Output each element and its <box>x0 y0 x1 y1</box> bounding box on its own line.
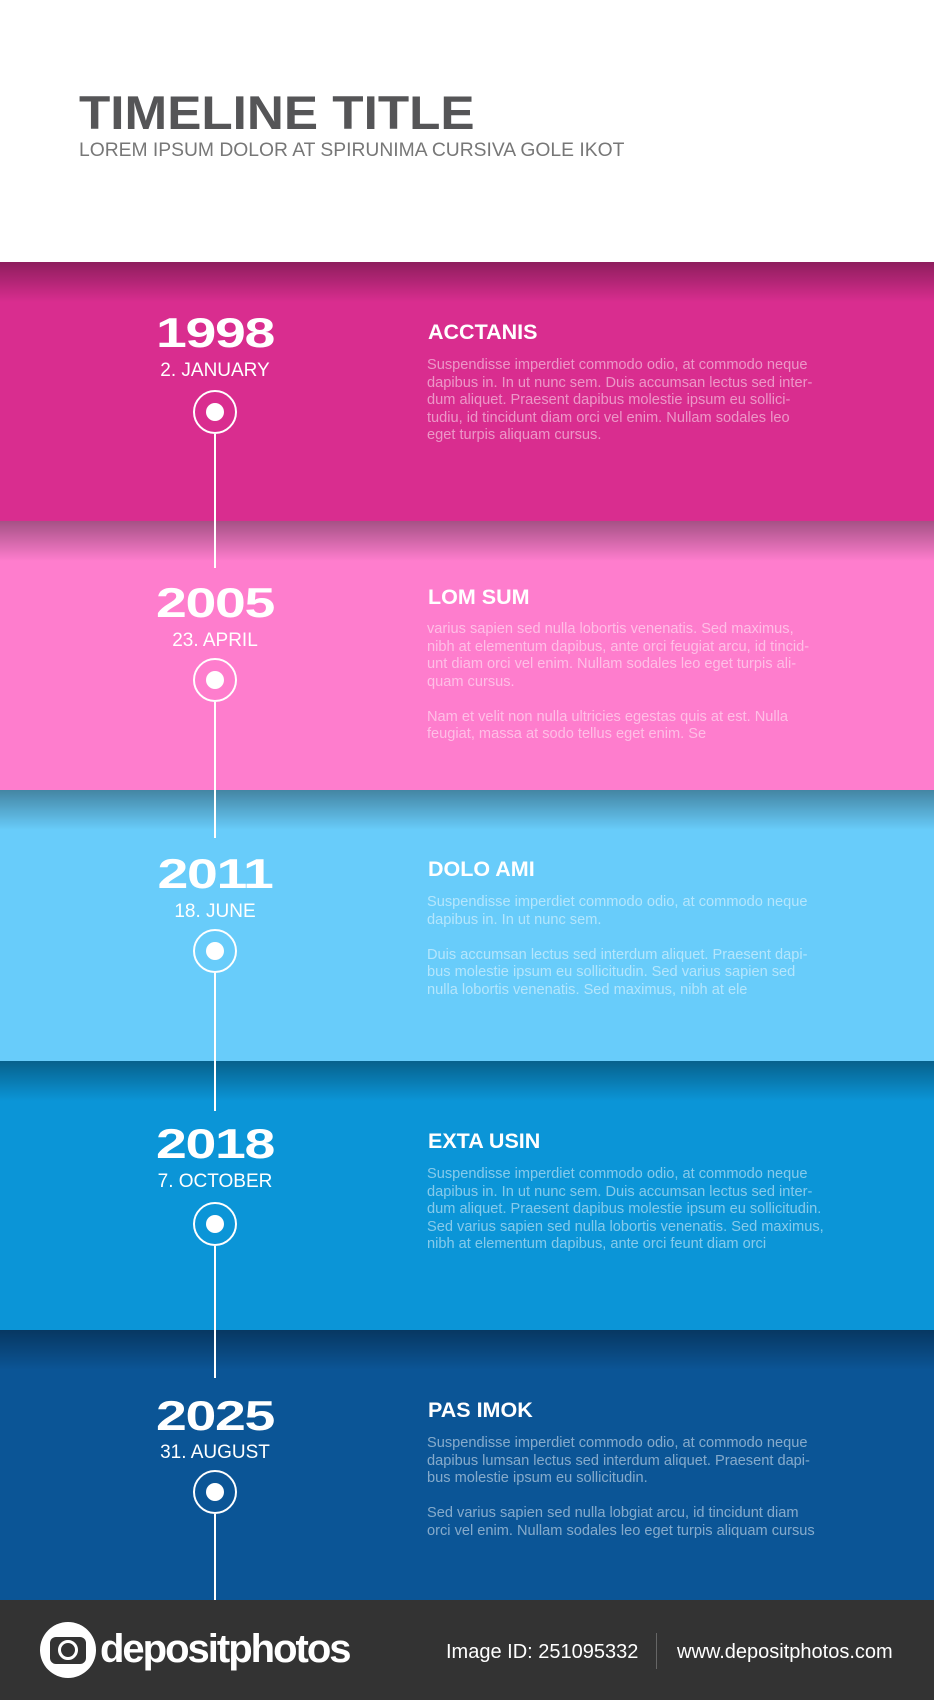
text 1998: tudiu, id tincidunt diam orci vel enim. Nullam sodales leo <box>427 410 790 426</box>
website: www.depositphotos.com <box>677 1641 893 1663</box>
text 2025: bus molestie ipsum eu sollicitudin. <box>427 1470 648 1486</box>
panel: 2018 <box>0 1061 934 1331</box>
text 2018: Suspendisse imperdiet commodo odio, at commodo neque <box>427 1166 807 1182</box>
date 2025: 31. AUGUST <box>160 1442 270 1463</box>
text 2018: dum aliquet. Praesent dapibus molestie ipsum eu sollicitudin. <box>427 1201 821 1217</box>
panel: 1998 <box>0 262 934 522</box>
footer <box>0 1600 934 1700</box>
text 1998 <box>427 357 812 443</box>
text 2011: Duis accumsan lectus sed interdum aliquet. Praesent dapi- <box>427 946 807 962</box>
text 2005: nibh at elementum dapibus, ante orci feugiat arcu, id tincid- <box>427 638 809 654</box>
subtitle: LOREM IPSUM DOLOR AT SPIRUNIMA CURSIVA GOLE IKOT <box>79 140 624 161</box>
year 2018: 2018 <box>156 1120 274 1167</box>
icon: circle 1998 <box>193 390 237 434</box>
text 2011 <box>427 894 807 998</box>
icon: camera logo <box>40 1622 96 1678</box>
date 2005: 23. APRIL <box>172 630 258 651</box>
date 1998: 2. JANUARY <box>160 360 270 381</box>
panel: 2011 <box>0 790 934 1062</box>
heading: DOLO AMI: DOLO AMI <box>428 857 535 881</box>
year 1998: 1998 <box>156 309 274 356</box>
year 2011: 2011 <box>157 850 273 897</box>
icon: circle 2011 <box>193 929 237 973</box>
icon: circle 2005 <box>193 658 237 702</box>
title: TIMELINE TITLE <box>79 86 475 139</box>
text 2025: Sed varius sapien sed nulla lobgiat arcu, id tincidunt diam <box>427 1505 799 1521</box>
text 2025 <box>427 1435 815 1538</box>
text 2005: Nam et velit non nulla ultricies egestas quis at est. Nulla <box>427 708 788 724</box>
icon: circle 2018 <box>193 1202 237 1246</box>
text 1998: eget turpis aliquam cursus. <box>427 427 601 443</box>
text 2025: orci vel enim. Nullam sodales leo eget turpis aliquam cursus <box>427 1522 815 1538</box>
heading: LOM SUM: LOM SUM <box>428 585 530 609</box>
text 2005: quam cursus. <box>427 674 515 690</box>
year 2005: 2005 <box>156 579 274 626</box>
text 1998: dapibus in. In ut nunc sem. Duis accumsan lectus sed inter- <box>427 374 812 390</box>
text 2011: nulla lobortis venenatis. Sed maximus, nibh at ele <box>427 982 747 998</box>
text 2011: Suspendisse imperdiet commodo odio, at commodo neque <box>427 894 807 910</box>
text 2025: Suspendisse imperdiet commodo odio, at commodo neque <box>427 1435 807 1451</box>
text 2005: varius sapien sed nulla lobortis venenatis. Sed maximus, <box>427 621 794 637</box>
text 2011: bus molestie ipsum eu sollicitudin. Sed varius sapien sed <box>427 964 795 980</box>
year 2025: 2025 <box>156 1392 274 1439</box>
heading: EXTA USIN: EXTA USIN <box>428 1129 540 1153</box>
text 2018: dapibus in. In ut nunc sem. Duis accumsan lectus sed inter- <box>427 1184 812 1200</box>
date 2011: 18. JUNE <box>174 901 256 922</box>
panel: 2025 <box>0 1330 934 1601</box>
text 2005 <box>427 621 809 742</box>
heading: PAS IMOK: PAS IMOK <box>428 1398 533 1422</box>
image id: Image ID: 251095332 <box>446 1641 638 1663</box>
heading: ACCTANIS: ACCTANIS <box>428 320 537 344</box>
icon: circle 2025 <box>193 1470 237 1514</box>
text 2011: dapibus in. In ut nunc sem. <box>427 912 601 928</box>
logo text: depositphotos <box>100 1627 350 1671</box>
text 2005: feugiat, massa at sodo tellus eget enim. Se <box>427 726 706 742</box>
text 2025: dapibus lumsan lectus sed interdum aliquet. Praesent dapi- <box>427 1452 810 1468</box>
text 2018: nibh at elementum dapibus, ante orci feunt diam orci <box>427 1236 766 1252</box>
text 2018: Sed varius sapien sed nulla lobortis venenatis. Sed maximus, <box>427 1218 824 1234</box>
text 2005: unt diam orci vel enim. Nullam sodales leo eget turpis ali- <box>427 656 796 672</box>
date 2018: 7. OCTOBER <box>158 1171 272 1192</box>
text 1998: dum aliquet. Praesent dapibus molestie ipsum eu sollici- <box>427 392 790 408</box>
panel: 2005 <box>0 521 934 791</box>
text 2018 <box>427 1166 824 1252</box>
text 1998: Suspendisse imperdiet commodo odio, at commodo neque <box>427 357 807 373</box>
